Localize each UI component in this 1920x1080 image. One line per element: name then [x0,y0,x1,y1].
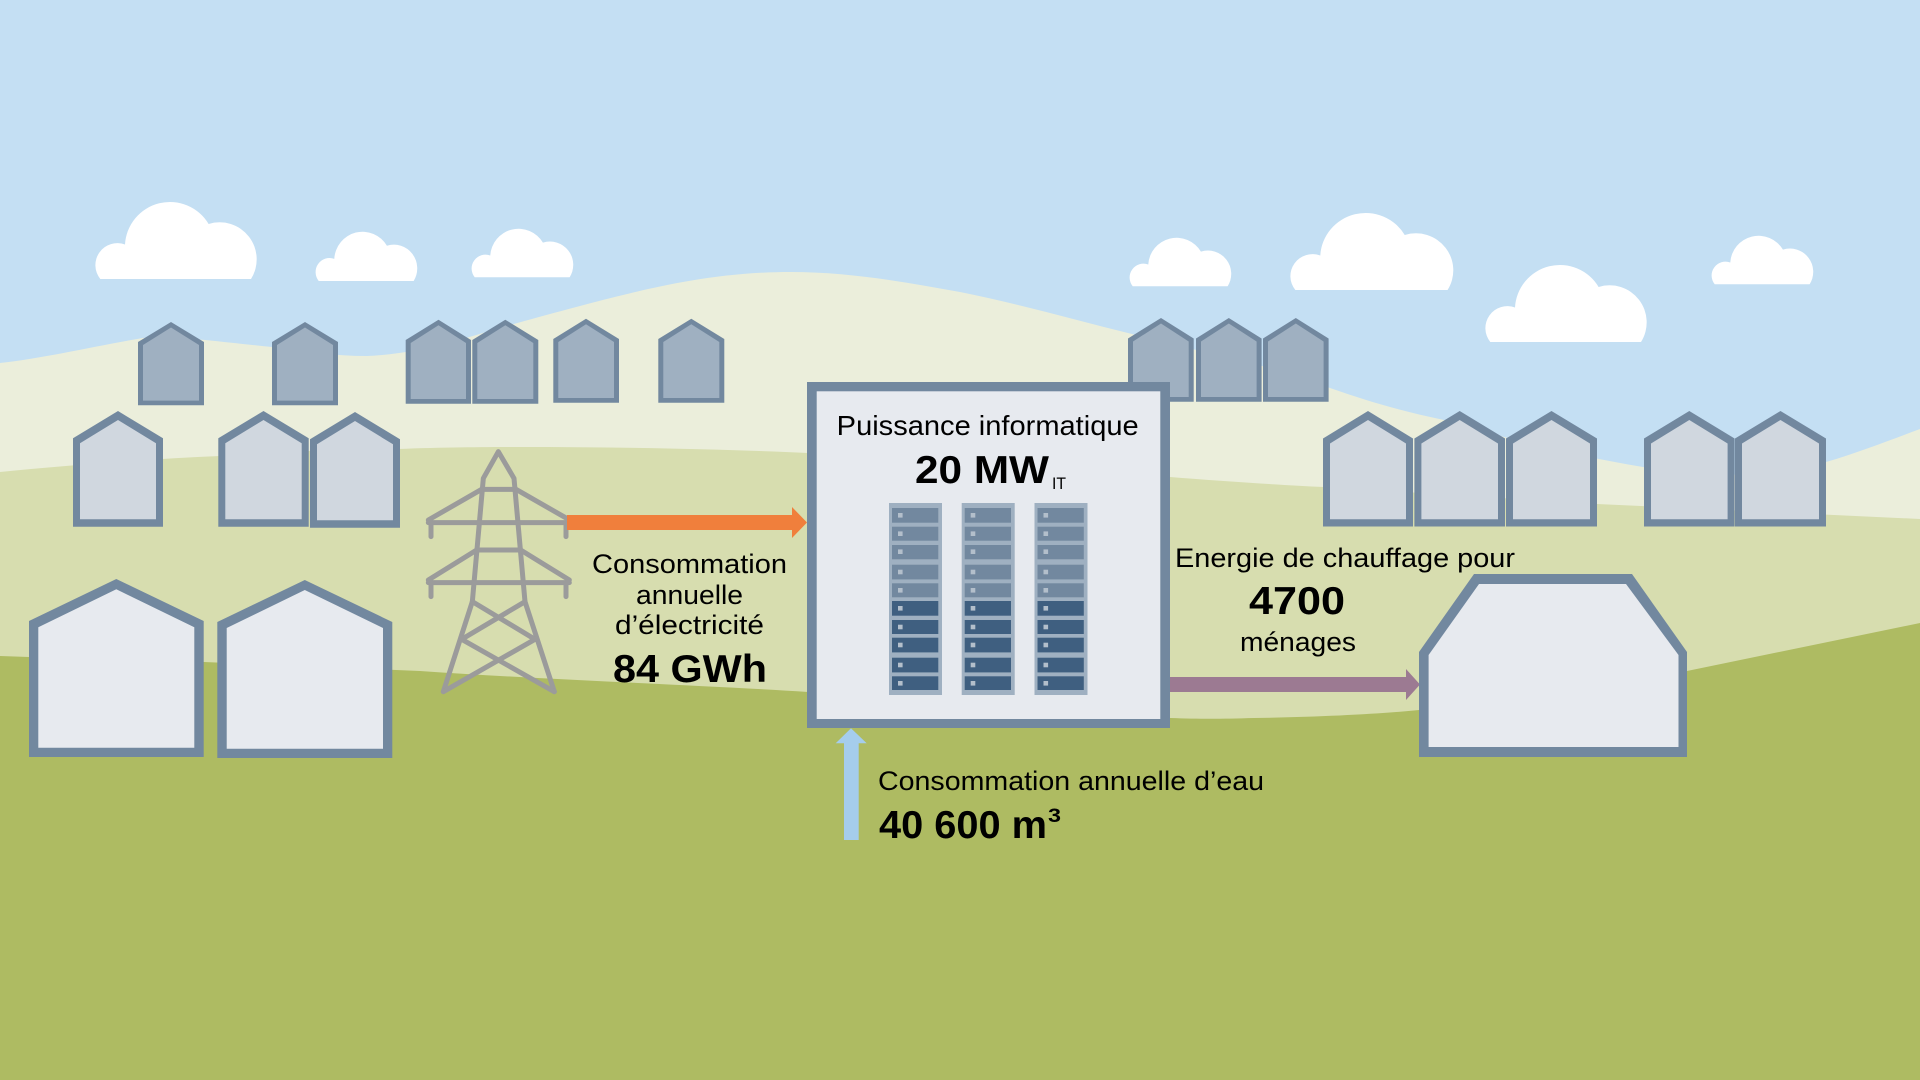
far hill [0,272,1920,1080]
house [1735,411,1826,526]
house [1506,411,1597,526]
house [406,320,471,404]
house [138,322,204,405]
house [73,411,163,527]
house [218,411,309,527]
arrow: heat output [1170,669,1420,700]
icon: server rack 2 [962,503,1015,695]
text: annual water consumption [878,766,1264,847]
text: annual electricity consumption [592,549,787,691]
text: heating energy [1175,543,1515,657]
house [272,322,338,405]
text: annual electricity consumption: 84 GWh [613,648,767,691]
cloud 6 [1485,265,1647,342]
panel: data centre building [807,382,1170,728]
panel: heat recipient building [1419,574,1687,757]
value: 20 MW IT: IT [1052,475,1066,493]
text: annual electricity consumption: d’électricité [615,610,764,640]
house [1196,318,1262,402]
cloud 1 [95,202,257,279]
house [1263,318,1329,402]
clouds [95,202,1813,342]
cloud 2 [316,232,417,281]
house [658,319,724,403]
icon: electricity pylon [428,452,569,692]
middle row of houses [73,411,1826,528]
icon: server rack 3 [1034,503,1088,695]
arrow: water input [836,728,867,840]
cloud 5 [1290,213,1453,290]
heading: computing power: Puissance informatique [837,410,1139,441]
value: 20 MW IT: 20 MW [915,449,1049,492]
text: annual water consumption: Consommation annuelle d’eau [878,766,1264,796]
cloud 4 [1130,238,1231,286]
arrow: electricity input [567,507,807,538]
middle hill [0,447,1920,1080]
back row of houses [138,318,1329,405]
house [1128,318,1194,402]
front row of large houses [29,579,392,758]
icon: server rack 1 [889,503,942,695]
cloud 7 [1712,236,1813,284]
large house [29,579,204,757]
text: annual water consumption: 3 [1048,806,1061,827]
text: annual electricity consumption: Consommation [592,549,787,579]
house [1644,411,1735,526]
large house [217,580,392,758]
cloud 3 [472,229,573,277]
text: heating energy: Energie de chauffage pour [1175,543,1515,573]
house [472,320,538,404]
text: annual electricity consumption: annuelle [636,580,743,610]
text: annual water consumption: 40 600 m [879,804,1047,847]
text: heating energy: 4700 [1249,580,1345,623]
text: heating energy: ménages [1240,627,1356,657]
house [1414,411,1505,526]
house [1323,411,1413,526]
foreground hill [0,623,1920,1080]
house [310,412,400,528]
house [553,319,619,403]
